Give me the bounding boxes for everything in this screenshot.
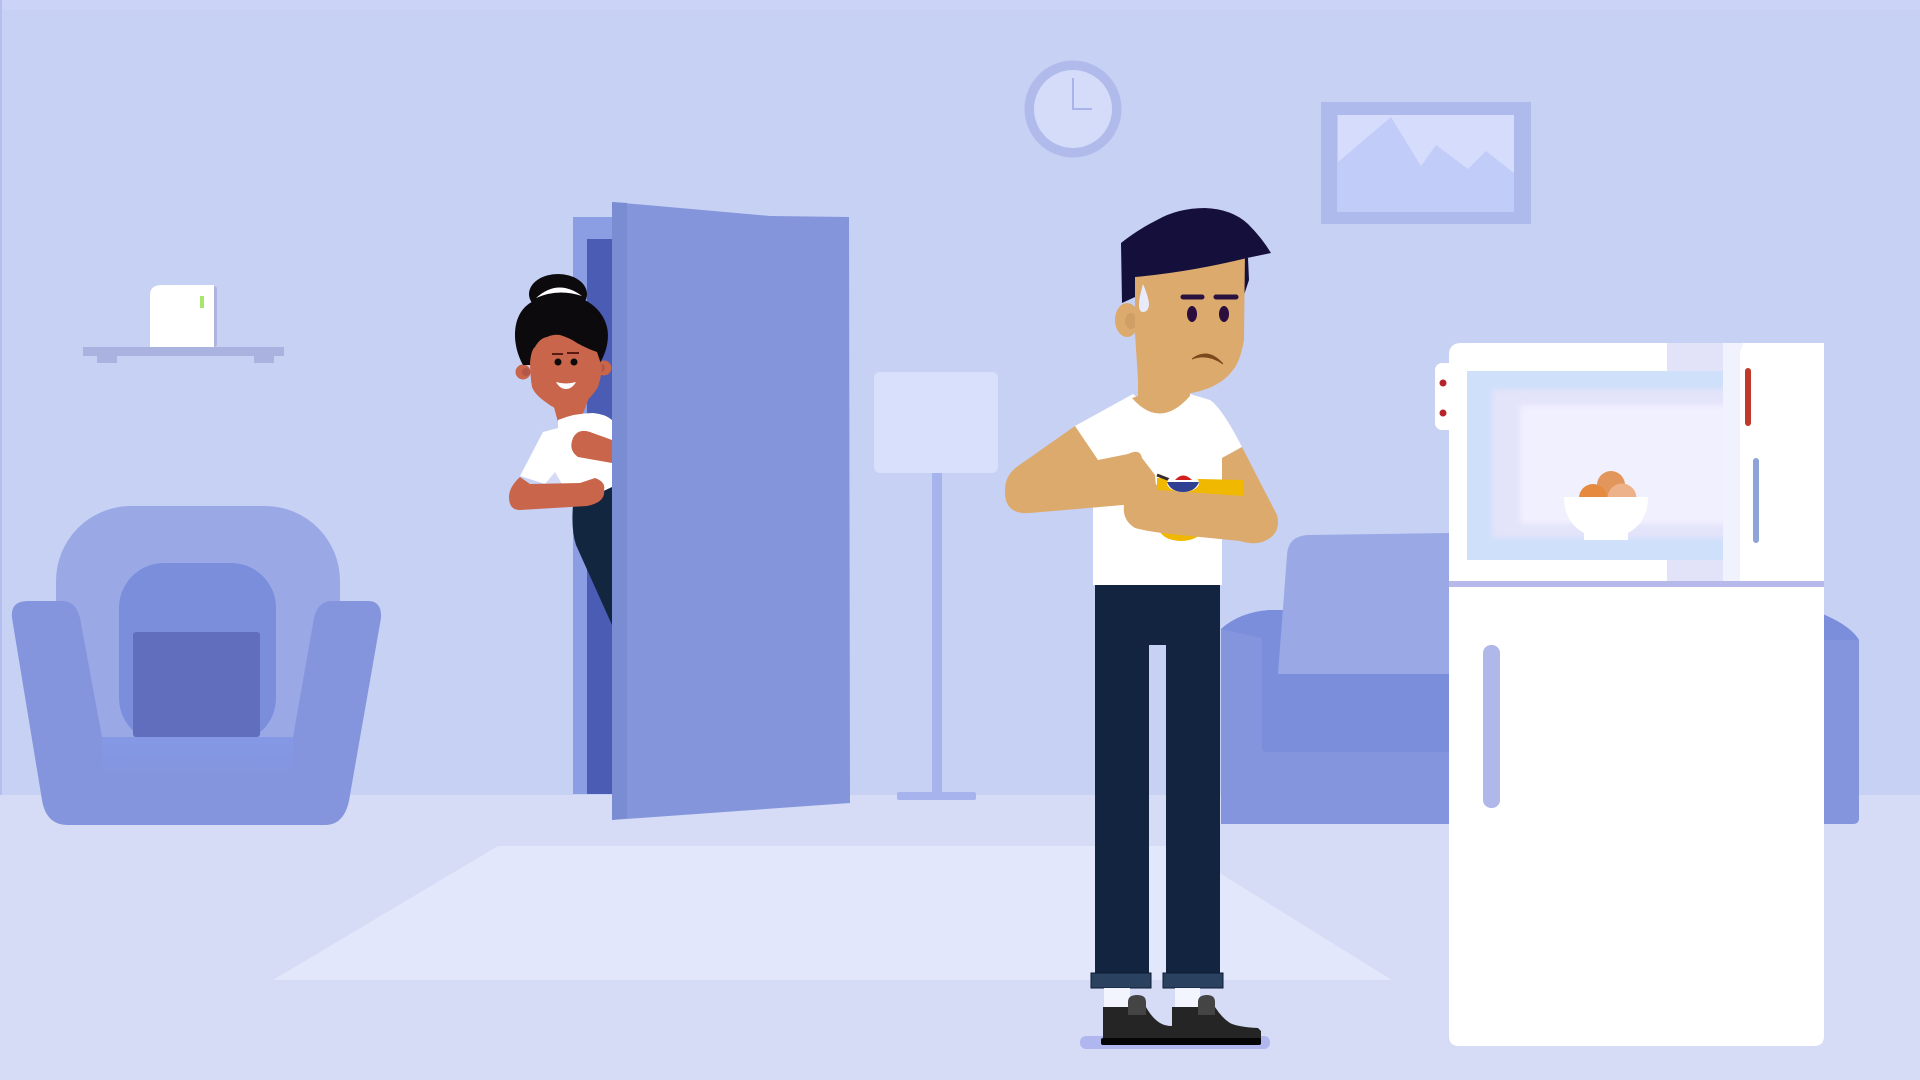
door <box>612 202 850 820</box>
woman: mouth <box>556 382 576 389</box>
man: socks <box>1104 988 1200 1008</box>
man: shadow <box>1080 1036 1270 1049</box>
bowl of oranges <box>1564 471 1648 540</box>
man: right arm <box>1124 447 1278 543</box>
man: shoes <box>1101 995 1261 1045</box>
man: eyes <box>1187 306 1197 322</box>
floor lamp <box>874 372 998 800</box>
woman: shirt <box>520 413 612 495</box>
wall <box>0 0 1920 796</box>
man with spoon <box>1005 208 1278 1049</box>
man: neck <box>1132 360 1190 414</box>
man: legs <box>1095 585 1220 973</box>
woman: lower arm <box>509 477 604 510</box>
man: yellow bowl <box>1159 515 1203 541</box>
fridge: separator <box>1449 581 1824 587</box>
man: back hair <box>1240 255 1249 298</box>
fridge: lower handle <box>1483 645 1500 808</box>
man: yellow bowl band <box>1157 478 1243 496</box>
man: hair <box>1121 208 1271 303</box>
woman: face <box>530 335 602 410</box>
woman peeking behind door <box>509 274 612 625</box>
door frame <box>573 217 613 794</box>
man: sweat drop <box>1139 284 1149 312</box>
fridge: open door <box>1740 343 1824 581</box>
man: left arm <box>1005 426 1158 513</box>
sofa <box>1221 533 1859 824</box>
woman: hair <box>515 295 608 365</box>
man: frown <box>1192 354 1223 364</box>
woman: neck <box>554 398 589 422</box>
fridge: red door bar <box>1745 368 1751 426</box>
fridge: hinge dots <box>1440 380 1446 416</box>
woman: eyes <box>554 358 562 366</box>
woman: trousers <box>572 480 612 625</box>
floor <box>0 795 1920 1080</box>
man: ear <box>1115 303 1139 337</box>
man: ear shade <box>1125 313 1137 329</box>
woman: bun <box>529 274 587 302</box>
fridge: door handle <box>1753 458 1759 543</box>
man: cuffs <box>1091 973 1223 988</box>
woman: eyebrows <box>552 353 579 354</box>
woman: shirt shadow <box>545 472 562 484</box>
woman: hair band <box>536 287 582 298</box>
woman: ears <box>516 360 612 380</box>
armchair <box>12 506 381 825</box>
woman: upper arm <box>571 431 612 463</box>
man: shirt <box>1075 394 1242 585</box>
man: spoon <box>1157 474 1199 492</box>
fridge: interior <box>1467 343 1752 581</box>
fridge: lower compartment <box>1449 587 1824 1046</box>
picture frame <box>1321 102 1531 224</box>
man: eyebrows <box>1183 294 1236 300</box>
man: face <box>1135 250 1245 396</box>
wall shelf with device <box>83 285 284 363</box>
fridge: freezer body <box>1449 343 1824 581</box>
wall clock <box>1024 60 1122 158</box>
fridge: hinge strip <box>1435 363 1457 430</box>
refrigerator <box>1435 343 1824 1046</box>
rug <box>273 846 1392 980</box>
